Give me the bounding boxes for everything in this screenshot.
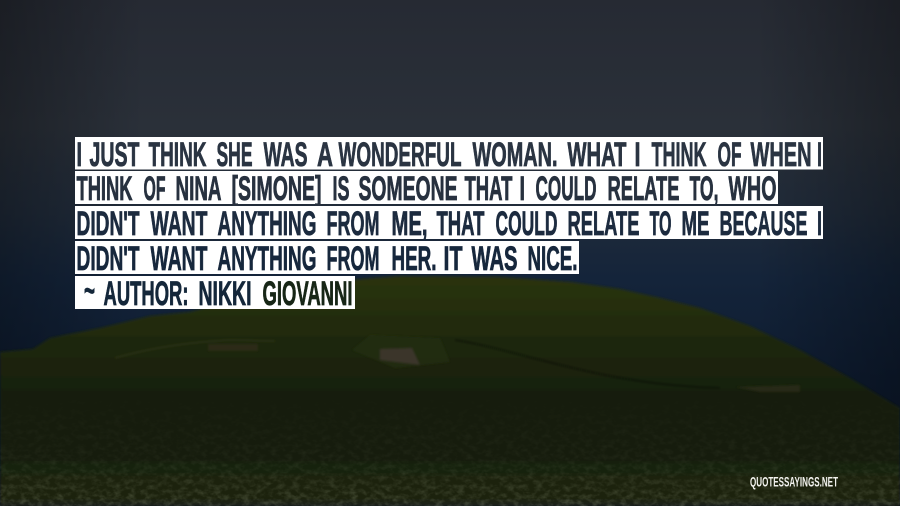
quote line 2: OF	[144, 170, 166, 208]
quote line 2: THAT	[464, 170, 512, 208]
quote line 1: A	[317, 136, 333, 174]
quote line 1: THINK	[148, 136, 207, 174]
background: green hillside	[0, 276, 900, 506]
quote line 3: DIDN'T	[76, 205, 140, 243]
quote line 2: SOMEONE	[358, 170, 458, 208]
quote line 3: THAT	[436, 205, 484, 243]
quote line 3: BECAUSE	[720, 205, 808, 243]
quote line 4: FROM	[326, 240, 380, 278]
quote line 3: TO	[650, 205, 672, 243]
quote line 2: THINK	[76, 170, 133, 208]
quote line 1: I	[634, 136, 640, 174]
quote line 3: ME	[682, 205, 710, 243]
author attribution: NIKKI	[198, 275, 252, 313]
quote text block	[75, 136, 823, 313]
quote line 1: WAS	[264, 136, 308, 174]
quote line 4: ANYTHING	[218, 240, 316, 278]
quote line 3: ME,	[392, 205, 428, 243]
quote line 2: [SIMONE]	[232, 170, 322, 208]
hillside paths and small buildings	[115, 335, 800, 392]
quote line 2	[75, 170, 778, 208]
quote line 2: NINA	[176, 170, 222, 208]
quote line 1: I	[817, 136, 822, 174]
quote line 1: WHEN	[750, 136, 812, 174]
quote line 1	[75, 136, 823, 174]
quote line 3	[75, 205, 823, 243]
quote line 3: COULD	[496, 205, 558, 243]
quote line 2: TO,	[690, 170, 718, 208]
quote line 3: I	[817, 205, 822, 243]
quote line 3: RELATE	[568, 205, 640, 243]
quote line 1: WOMAN.	[472, 136, 558, 174]
quote line 2: COULD	[536, 170, 596, 208]
quote line 1: SHE	[216, 136, 252, 174]
author attribution: GIOVANNI	[262, 275, 352, 313]
quote line 4: DIDN'T	[76, 240, 140, 278]
quote line 2: WHO	[728, 170, 776, 208]
quote line 1: THINK	[652, 136, 707, 174]
author attribution: AUTHOR:	[104, 275, 188, 313]
author attribution: ~	[84, 272, 95, 310]
quote line 4: NICE.	[528, 240, 578, 278]
quote line 1: WHAT	[568, 136, 626, 174]
quote line 4: IT	[444, 240, 462, 278]
quote line 2: I	[520, 170, 525, 208]
author attribution	[75, 272, 355, 313]
quote line 1: I	[76, 136, 82, 174]
quote line 2: IS	[332, 170, 350, 208]
quote line 3: WANT	[150, 205, 208, 243]
watermark: QUOTESSAYINGS.NET	[750, 474, 838, 490]
quote line 1: WONDERFUL	[338, 136, 462, 174]
quote line 4	[75, 240, 579, 278]
quote line 3: FROM	[326, 205, 380, 243]
quote line 3: ANYTHING	[218, 205, 316, 243]
quote line 1: OF	[718, 136, 742, 174]
quote line 1: JUST	[90, 136, 140, 174]
quote line 2: RELATE	[608, 170, 680, 208]
quote line 4: HER.	[392, 240, 436, 278]
quote line 4: WAS	[472, 240, 518, 278]
quote line 4: WANT	[150, 240, 208, 278]
